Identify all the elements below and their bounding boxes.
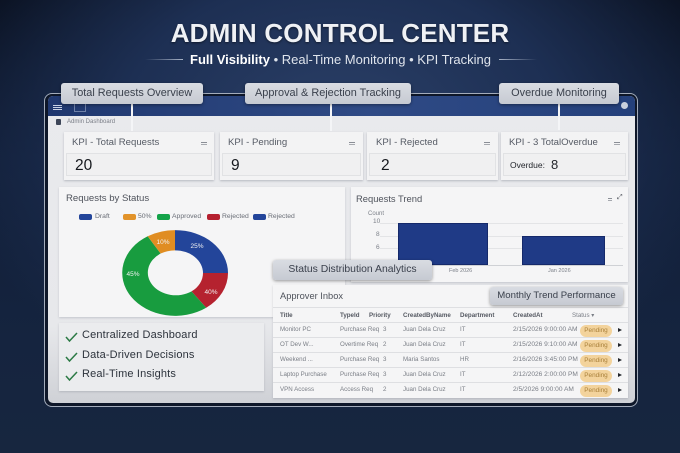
- donut chart: [122, 230, 228, 316]
- KPI card: overdue: 8: [551, 157, 558, 172]
- panel: requests trend: [351, 187, 628, 282]
- donut legend: Rejected: [222, 213, 249, 220]
- breadcrumb: Admin Dashboard: [67, 119, 115, 125]
- panel: requests by status: [59, 187, 345, 317]
- table row: Laptop Purchase: Laptop Purchase: [280, 371, 327, 378]
- window close icon: [621, 102, 628, 109]
- table header: Department: [460, 312, 494, 319]
- table row: Weekend ...: 2/16/2026 3:45:00 PM: [513, 356, 578, 363]
- panel: benefits checklist: [59, 323, 264, 391]
- filter icon: [608, 198, 612, 201]
- dashboard window: [44, 93, 638, 407]
- callout: total requests overview: Total Requests Overview: [72, 87, 192, 99]
- connector: approval tracking: [330, 104, 332, 131]
- item: centralized dashboard: Centralized Dashboard: [82, 329, 198, 341]
- callout: approval and rejection tracking: [245, 83, 411, 104]
- table row: VPN Access: IT: [460, 386, 466, 393]
- table row: Monitor PC: IT: [460, 326, 466, 333]
- bar chart: Jan 2026: [548, 268, 571, 274]
- KPI card: overdue: Overdue:: [510, 160, 545, 170]
- callout: status distribution analytics: Status Distribution Analytics: [288, 264, 417, 275]
- window body: [48, 96, 635, 403]
- donut legend: 50%: [138, 213, 152, 220]
- table row: VPN Access: 2/5/2026 9:00:00 AM: [513, 386, 574, 393]
- table row: Laptop Purchase: [273, 368, 628, 383]
- table row: Monitor PC: Purchase Req: [340, 326, 379, 333]
- KPI card: total requests: KPI - Total Requests: [72, 137, 159, 148]
- table row: Weekend ...: Maria Santos: [403, 356, 439, 363]
- bar chart: Count: [368, 211, 384, 217]
- table header: [273, 307, 628, 323]
- table row: OT Dev W...: OT Dev W...: [280, 341, 314, 348]
- subtitle rule right: [499, 59, 537, 60]
- subtitle: Full Visibility • Real-Time Monitoring • KPI Tracking: [190, 52, 491, 67]
- table row: Weekend ...: HR: [460, 356, 469, 363]
- table row: OT Dev W...: Pending: [584, 342, 608, 348]
- table row: Laptop Purchase: Juan Dela Cruz: [403, 371, 446, 378]
- callout: overdue monitoring: [499, 83, 619, 104]
- table header: CreatedByName: [403, 312, 451, 319]
- table row: Laptop Purchase: 2/12/2026 2:00:00 PM: [513, 371, 578, 378]
- callout: total requests overview: [61, 83, 203, 104]
- KPI card: pending: [220, 132, 363, 180]
- item: real-time insights: Real-Time Insights: [82, 368, 176, 380]
- table row: Monitor PC: Pending: [584, 326, 608, 334]
- table: [273, 307, 628, 397]
- table header: TypeId: [340, 312, 359, 319]
- bar: Jan 2026: [522, 236, 605, 265]
- table header: Priority: [369, 312, 391, 319]
- subtitle rule left: [145, 59, 183, 60]
- table row: OT Dev W...: 2/15/2026 9:10:00 AM: [513, 341, 578, 348]
- table row: Weekend ...: Weekend ...: [280, 356, 313, 363]
- check icons: [66, 332, 78, 382]
- KPI card: total requests: 20: [75, 157, 92, 174]
- table row: VPN Access: 2: [383, 386, 386, 393]
- table row: Weekend ...: Purchase Req: [340, 356, 379, 363]
- expand icon: ⤢: [617, 194, 623, 201]
- donut legend: Rejected: [268, 213, 295, 220]
- table row: Monitor PC: Monitor PC: [280, 326, 311, 333]
- connector: overdue: [558, 104, 560, 130]
- table row: VPN Access: Access Req: [340, 386, 373, 393]
- callout: status distribution analytics: [273, 260, 432, 280]
- connector: total requests: [131, 104, 133, 131]
- table row: OT Dev W...: Juan Dela Cruz: [403, 341, 446, 348]
- table row: Weekend ...: 3: [383, 356, 386, 363]
- donut legend: Approved: [172, 213, 201, 220]
- table row: OT Dev W...: Overtime Req: [340, 341, 378, 348]
- table row: VPN Access: Juan Dela Cruz: [403, 386, 446, 393]
- table row: VPN Access: VPN Access: [280, 386, 314, 393]
- KPI card: rejected: KPI - Rejected: [376, 137, 438, 148]
- bar chart: 10: [373, 218, 380, 225]
- donut chart: 40%: [204, 289, 218, 296]
- KPI card: rejected: 2: [381, 157, 390, 174]
- panel heading: Approver Inbox: [280, 290, 343, 300]
- title: ADMIN CONTROL CENTER: [171, 18, 509, 48]
- callout: monthly trend performance: [490, 287, 623, 305]
- panel heading: Requests Trend: [356, 192, 422, 204]
- donut chart: 45%: [126, 271, 140, 278]
- KPI card: overdue: KPI - 3 TotalOverdue: [509, 137, 598, 148]
- table row: Weekend ...: [273, 353, 628, 368]
- table row: Laptop Purchase: IT: [460, 371, 466, 378]
- table row: Laptop Purchase: Pending: [584, 372, 608, 378]
- table row: Weekend ...: Pending: [584, 356, 608, 364]
- KPI card: pending: 9: [231, 157, 240, 174]
- KPI card: total requests: [64, 132, 214, 180]
- donut chart: 10%: [156, 239, 170, 246]
- table header: Title: [280, 312, 293, 319]
- table row: VPN Access: [280, 385, 622, 397]
- table row: Monitor PC: [273, 323, 628, 338]
- table row: Laptop Purchase: Purchase Req: [340, 371, 379, 378]
- panel: approver inbox: [273, 285, 628, 398]
- KPI card: overdue: [501, 132, 628, 180]
- bar chart: 6: [376, 244, 380, 251]
- callout: monthly trend performance: Monthly Trend Performance: [497, 290, 616, 301]
- callout: approval and rejection tracking: Approval & Rejection Tracking: [255, 87, 401, 99]
- table row: Monitor PC: 3: [383, 326, 386, 333]
- header icons: [53, 104, 86, 112]
- item: data-driven decisions: Data-Driven Decisions: [82, 349, 195, 361]
- bar chart: Feb 2026: [449, 268, 472, 274]
- table row: OT Dev W...: 2: [383, 341, 386, 348]
- panel heading: Requests by Status: [66, 192, 149, 204]
- table row: OT Dev W...: IT: [460, 341, 466, 348]
- table row: OT Dev W...: [273, 338, 628, 353]
- table row: Monitor PC: Juan Dela Cruz: [403, 326, 446, 333]
- table row: VPN Access: Pending: [584, 386, 608, 394]
- table header: CreatedAt: [513, 312, 543, 319]
- bar chart: [368, 210, 623, 274]
- callout: overdue monitoring: Overdue Monitoring: [511, 87, 607, 99]
- donut chart: 25%: [190, 243, 204, 250]
- table header: Status ▾: [572, 312, 594, 319]
- table row: Laptop Purchase: 3: [383, 371, 386, 378]
- donut legend: [79, 213, 295, 220]
- window header bar: [48, 96, 635, 116]
- donut legend: Draft: [95, 213, 110, 220]
- KPI card: rejected: [367, 132, 498, 180]
- bar chart: 8: [376, 231, 380, 238]
- table row: Monitor PC: 2/15/2026 9:00:00 AM: [513, 326, 578, 333]
- bar: Feb 2026: [398, 223, 488, 265]
- KPI card: pending: KPI - Pending: [228, 137, 287, 148]
